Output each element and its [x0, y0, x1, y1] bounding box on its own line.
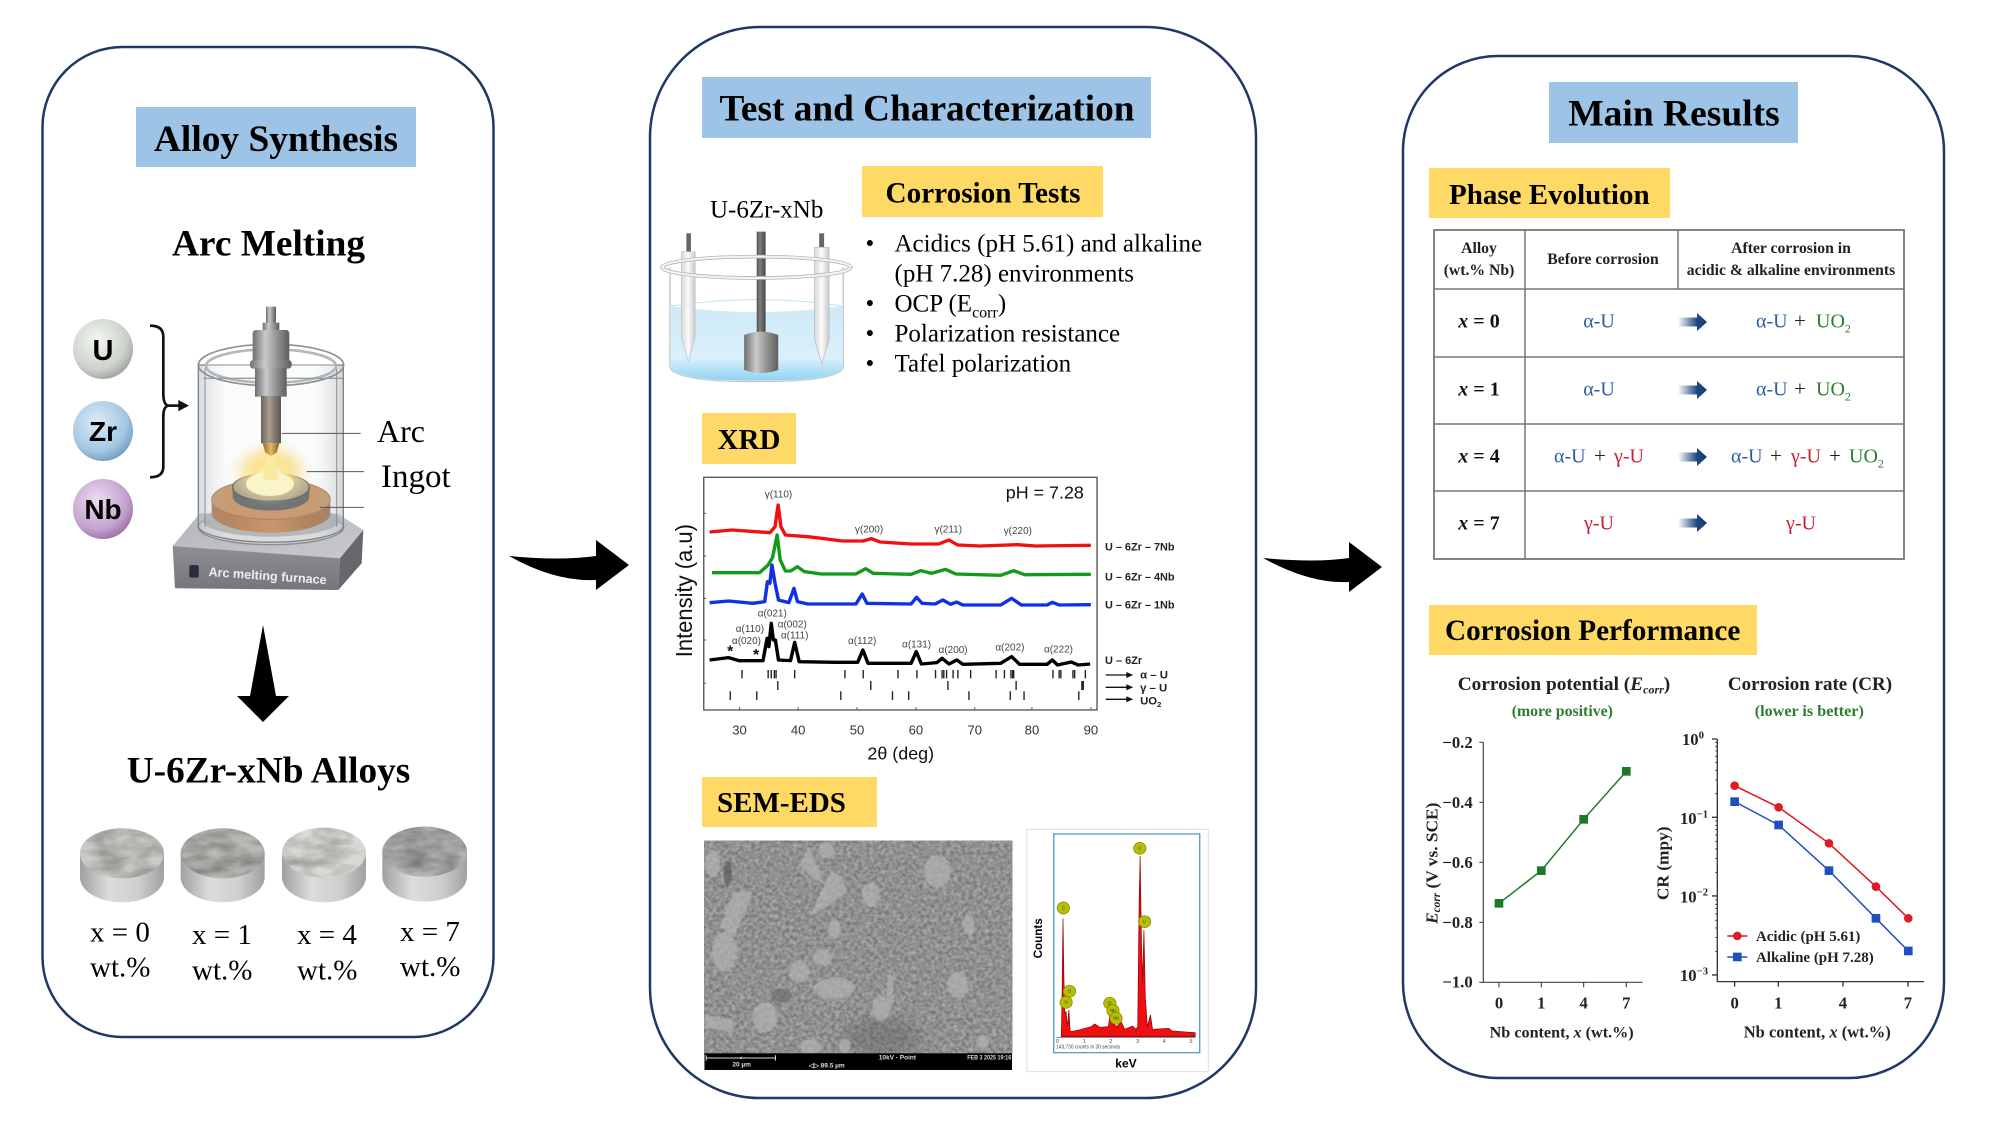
heading: test and characterization: Test and Characterization	[719, 88, 1135, 130]
chart: EDS spectrum	[1027, 829, 1208, 1072]
subheading: alloys: U-6Zr-xNb Alloys	[127, 750, 410, 792]
chart: corrosion potential: 1	[1537, 993, 1545, 1012]
table: phase evolution: x = 7	[1457, 512, 1500, 534]
chart: EDS spectrum: 0	[1056, 1039, 1059, 1045]
chart: corrosion rate: 1	[1774, 993, 1782, 1012]
text block: corrosion test list: Polarization resistance	[894, 320, 1120, 348]
image: SEM micrograph	[704, 841, 1012, 1070]
subheading: XRD: XRD	[718, 424, 780, 456]
chart: corrosion potential: 7	[1622, 993, 1630, 1012]
table: phase evolution: x = 4	[1457, 446, 1500, 468]
chart: EDS spectrum: Counts	[1031, 918, 1045, 958]
table: phase evolution: γ-U	[1785, 512, 1817, 534]
chart: corrosion potential: −1.0	[1442, 972, 1473, 991]
table: phase evolution: x = 1	[1457, 378, 1500, 400]
text block: corrosion test list: Acidics (pH 5.61) and alkaline	[894, 230, 1202, 258]
arrow: synthesis to characterization	[509, 540, 629, 590]
chart: corrosion rate: −2	[1697, 888, 1708, 899]
table: phase evolution: UO	[1816, 310, 1845, 332]
label: arc: Arc	[377, 413, 425, 449]
chart: XRD patterns: α(202)	[995, 643, 1024, 654]
table: phase evolution: 2	[1845, 322, 1851, 336]
chart: EDS spectrum: U	[1138, 846, 1141, 851]
icon: arc melting furnace: Arc melting furnace	[208, 565, 327, 587]
subheading: arc melting: Arc Melting	[172, 224, 365, 264]
chart: corrosion rate: 10	[1680, 966, 1697, 985]
table: phase evolution: UO	[1849, 446, 1878, 468]
chart: XRD patterns: U – 6Zr – 7Nb	[1105, 542, 1175, 554]
chart: XRD patterns: γ – U	[1140, 682, 1167, 694]
chart: XRD patterns: 40	[791, 723, 805, 737]
table: phase evolution: α-U	[1731, 446, 1763, 468]
chart: corrosion potential: 0	[1495, 993, 1503, 1012]
chart: XRD patterns: γ(211)	[935, 524, 962, 535]
chart: EDS spectrum: 5	[1190, 1039, 1193, 1045]
table: phase evolution: +	[1829, 444, 1841, 468]
chart: EDS spectrum: U	[1143, 919, 1146, 924]
chart: EDS spectrum: 1	[1083, 1039, 1086, 1045]
chart: XRD patterns: α(020)	[732, 636, 761, 647]
chart: corrosion rate: 10	[1680, 887, 1697, 906]
chart: corrosion rate: (lower is better)	[1755, 703, 1864, 720]
label: ingot: Ingot	[381, 459, 451, 495]
chart: corrosion rate: 10	[1682, 730, 1699, 749]
subheading: SEM-EDS: SEM-EDS	[717, 787, 846, 819]
chart: corrosion rate: 10	[1680, 809, 1697, 828]
chart: corrosion potential: Corrosion potential (E	[1458, 674, 1643, 695]
table: phase evolution: γ-U	[1613, 446, 1644, 468]
heading: alloy synthesis	[136, 107, 416, 167]
chart: corrosion potential	[1422, 674, 1670, 1041]
table: phase evolution: α-U	[1583, 378, 1615, 400]
panel: main results	[1403, 56, 1944, 1078]
subheading: XRD	[702, 413, 796, 464]
chart: corrosion potential: −0.6	[1442, 853, 1473, 872]
chart: corrosion potential: corr	[1431, 892, 1443, 912]
label: x = 7 wt.%	[400, 916, 460, 983]
chart: XRD patterns: Intensity (a.u)	[672, 524, 697, 657]
panel frame: test and characterization	[650, 27, 1256, 1098]
label: x = 4 wt.%: wt.%	[297, 954, 357, 986]
chart: XRD patterns: α(111)	[781, 631, 808, 642]
label: x = 4 wt.%	[297, 919, 357, 986]
chart: XRD patterns: α(110)	[736, 624, 764, 635]
table: phase evolution: +	[1794, 308, 1806, 332]
subheading: SEM-EDS	[702, 777, 877, 827]
chart: XRD patterns: 30	[732, 723, 747, 737]
table: phase evolution: After corrosion in	[1731, 240, 1851, 257]
label: U-6Zr-xNb electrode: U-6Zr-xNb	[710, 196, 823, 224]
chart: XRD patterns: γ(200)	[855, 524, 883, 535]
icons: element spheres U, Zr, Nb	[73, 319, 133, 539]
chart: XRD patterns: UO	[1140, 695, 1157, 707]
chart: corrosion potential: (V vs. SCE)	[1422, 802, 1441, 893]
table: phase evolution: (wt.% Nb)	[1444, 262, 1514, 279]
image: SEM micrograph: 10kV - Point	[879, 1055, 917, 1062]
chart: corrosion potential: −0.8	[1442, 913, 1473, 932]
subheading: corrosion tests: Corrosion Tests	[886, 178, 1080, 210]
chart: EDS spectrum: Zr	[1108, 1001, 1112, 1006]
text block: corrosion test list	[866, 230, 1202, 378]
subheading: corrosion performance	[1429, 605, 1757, 655]
chart: XRD patterns: *	[753, 647, 760, 664]
chart: corrosion rate: Acidic (pH 5.61)	[1756, 929, 1860, 945]
chart: corrosion rate	[1654, 674, 1924, 1041]
chart: XRD patterns: γ(110)	[765, 490, 792, 501]
text block: corrosion test list: •	[866, 320, 874, 348]
table: phase evolution: +	[1770, 444, 1782, 468]
text block: corrosion test list: Tafel polarization	[894, 350, 1072, 378]
chart: corrosion rate: 7	[1904, 993, 1912, 1012]
table: phase evolution: γ-U	[1583, 512, 1615, 534]
chart: corrosion rate: 0	[1699, 730, 1704, 741]
icon: electrochemical cell	[662, 232, 851, 382]
chart: XRD patterns: pH = 7.28	[1006, 483, 1084, 502]
chart: corrosion rate: −3	[1697, 966, 1708, 977]
text block: corrosion test list: corr	[972, 304, 998, 322]
chart: corrosion potential: −0.4	[1442, 793, 1473, 812]
subheading: phase evolution: Phase Evolution	[1449, 179, 1650, 211]
chart: XRD patterns: 50	[850, 723, 864, 737]
chart: XRD patterns: α(112)	[848, 636, 876, 647]
panel frame: main results	[1403, 56, 1944, 1078]
subheading: corrosion performance: Corrosion Performance	[1445, 615, 1740, 647]
panel: test and characterization	[650, 27, 1256, 1098]
chart: EDS spectrum: Nb	[1113, 1016, 1119, 1021]
chart: EDS spectrum: Nb	[1110, 1008, 1116, 1013]
chart: corrosion potential: E	[1422, 912, 1441, 925]
heading: alloy synthesis: Alloy Synthesis	[154, 119, 398, 160]
table: phase evolution: α-U	[1756, 378, 1788, 400]
chart: corrosion rate: 4	[1839, 993, 1848, 1012]
table: phase evolution: γ-U	[1790, 446, 1821, 468]
chart: XRD patterns	[672, 477, 1175, 763]
chart: EDS spectrum: 4	[1163, 1039, 1166, 1045]
label: x = 0 wt.%: wt.%	[90, 952, 150, 984]
table: phase evolution: +	[1794, 376, 1806, 400]
table: phase evolution: α-U	[1554, 446, 1586, 468]
chart: XRD patterns: α – U	[1140, 670, 1168, 682]
label: x = 0 wt.%: x = 0	[90, 916, 150, 948]
image: SEM micrograph: ◁▷ 89.5 µm	[808, 1063, 845, 1070]
samples: four alloy discs	[80, 827, 467, 902]
table: phase evolution: Alloy	[1461, 240, 1497, 257]
chart: corrosion potential: 4	[1579, 993, 1588, 1012]
chart: corrosion potential: (more positive)	[1512, 703, 1613, 720]
chart: EDS spectrum: 143,730 counts in 30 seconds	[1056, 1045, 1121, 1051]
label: x = 1 wt.%: x = 1	[192, 919, 252, 951]
chart: XRD patterns: 60	[909, 723, 923, 737]
heading: main results	[1549, 82, 1798, 143]
table: phase evolution	[1434, 230, 1904, 559]
chart: XRD patterns: γ(220)	[1004, 526, 1032, 537]
arrow: bracket into furnace	[150, 326, 189, 477]
text block: corrosion test list: )	[998, 290, 1006, 318]
heading: test and characterization	[702, 77, 1151, 138]
label: x = 7 wt.%: wt.%	[400, 951, 460, 983]
text block: corrosion test list: •	[866, 350, 874, 378]
label: x = 4 wt.%: x = 4	[297, 919, 357, 951]
chart: XRD patterns: U – 6Zr – 4Nb	[1105, 572, 1175, 584]
label: x = 7 wt.%: x = 7	[400, 916, 460, 948]
chart: EDS spectrum: C	[1062, 905, 1065, 910]
icons: element spheres U, Zr, Nb: Nb	[84, 494, 122, 525]
chart: XRD patterns: α(222)	[1044, 644, 1073, 655]
chart: XRD patterns: 2θ (deg)	[867, 744, 934, 763]
chart: corrosion rate: 0	[1730, 993, 1739, 1012]
chart: EDS spectrum: 3	[1136, 1039, 1139, 1045]
heading: main results: Main Results	[1568, 94, 1780, 134]
icons: element spheres U, Zr, Nb: U	[93, 335, 113, 367]
chart: XRD patterns: α(131)	[902, 639, 931, 650]
table: phase evolution: 2	[1878, 456, 1884, 470]
image: SEM micrograph: 20 µm	[732, 1062, 751, 1069]
table: phase evolution: UO	[1816, 378, 1845, 400]
text block: corrosion test list: OCP (E	[894, 290, 972, 318]
chart: EDS spectrum: 2	[1109, 1039, 1112, 1045]
chart: XRD patterns: α(002)	[778, 620, 807, 631]
table: phase evolution: 2	[1845, 390, 1851, 404]
chart: XRD patterns: 2	[1157, 700, 1161, 709]
subheading: corrosion tests	[862, 166, 1103, 217]
table: phase evolution: Before corrosion	[1547, 251, 1659, 268]
chart: XRD patterns: U – 6Zr	[1105, 655, 1143, 667]
arrow: down to alloys	[237, 625, 289, 722]
icons: element spheres U, Zr, Nb: Zr	[89, 416, 117, 447]
chart: corrosion rate: Alkaline (pH 7.28)	[1756, 950, 1874, 966]
chart: XRD patterns: *	[727, 644, 734, 661]
chart: EDS spectrum: O	[1068, 989, 1072, 994]
chart: XRD patterns: 80	[1025, 723, 1039, 737]
label: x = 1 wt.%: wt.%	[192, 954, 252, 986]
subheading: phase evolution	[1429, 168, 1670, 218]
table: phase evolution: x = 0	[1457, 310, 1500, 332]
chart: corrosion rate: Nb content, x (wt.%)	[1744, 1022, 1891, 1041]
panel frame: alloy synthesis	[42, 47, 494, 1037]
table: phase evolution: α-U	[1583, 310, 1615, 332]
chart: XRD patterns: 90	[1084, 723, 1098, 737]
arrow: characterization to results	[1263, 542, 1382, 592]
chart: corrosion potential: corr	[1643, 682, 1664, 696]
text block: corrosion test list: •	[866, 230, 874, 258]
chart: corrosion potential: Nb content, x (wt.%)	[1490, 1024, 1634, 1041]
chart: XRD patterns: α(021)	[758, 609, 787, 620]
image: SEM micrograph: FEB 3 2025 19:16	[967, 1055, 1012, 1062]
panel: alloy synthesis	[42, 47, 494, 1037]
chart: corrosion rate: Corrosion rate (CR)	[1728, 674, 1892, 695]
text block: corrosion test list: •	[866, 290, 874, 318]
chart: EDS spectrum: N	[1064, 1000, 1068, 1005]
chart: corrosion rate: −1	[1697, 809, 1708, 820]
label: x = 0 wt.%	[90, 916, 150, 984]
table: phase evolution: acidic & alkaline environments	[1687, 262, 1895, 279]
chart: XRD patterns: 70	[968, 723, 982, 737]
chart: corrosion potential: −0.2	[1442, 733, 1473, 752]
text block: corrosion test list: (pH 7.28) environments	[894, 260, 1134, 288]
chart: EDS spectrum: keV	[1115, 1056, 1137, 1070]
chart: corrosion rate: CR (mpy)	[1654, 826, 1673, 900]
chart: XRD patterns: α(200)	[939, 645, 968, 656]
label: x = 1 wt.%	[192, 919, 252, 986]
chart: corrosion potential: )	[1664, 674, 1670, 695]
chart: XRD patterns: U – 6Zr – 1Nb	[1105, 600, 1175, 612]
icon: arc melting furnace	[173, 307, 364, 590]
table: phase evolution: +	[1594, 444, 1606, 468]
table: phase evolution: α-U	[1756, 310, 1788, 332]
